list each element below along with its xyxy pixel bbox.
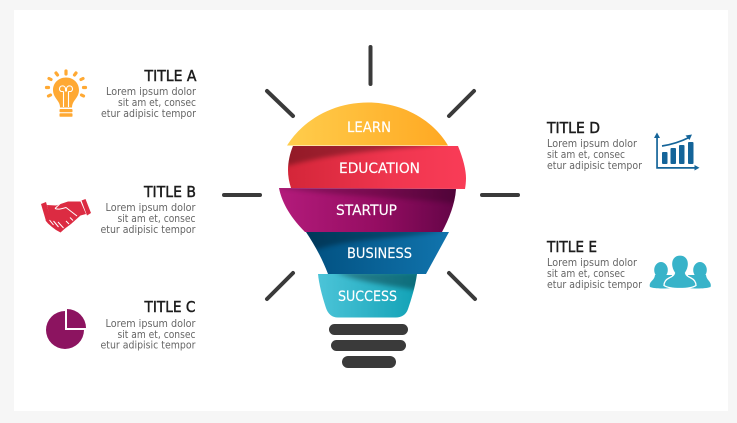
text: body B: sit am et, consec: [118, 212, 196, 225]
icon: light bulb: [46, 71, 86, 117]
text: title E: TITLE E: [546, 238, 597, 256]
segment: business: [306, 232, 449, 274]
text: title A: TITLE A: [144, 67, 197, 85]
text: title D: TITLE D: [546, 119, 600, 137]
segment: success: [318, 272, 422, 318]
segment: startup: [275, 186, 462, 232]
text: body C: etur adipisic tempor: [100, 338, 196, 352]
text: body C: sit am et, consec: [118, 328, 196, 341]
segment: startup: STARTUP: [336, 203, 397, 219]
segment: education: EDUCATION: [339, 161, 420, 177]
text: body E: [547, 256, 642, 291]
icon: handshake: [41, 199, 91, 232]
block: title A: [46, 67, 197, 120]
central lightbulb: [275, 102, 466, 368]
text: body B: Lorem ipsum dolor: [106, 201, 196, 214]
block: title C: [46, 298, 196, 352]
lightbulb rays: [224, 47, 518, 299]
text: body B: etur adipisic tempor: [100, 223, 196, 236]
bulb base: [329, 324, 408, 368]
text: body E: etur adipisic tempor: [547, 278, 642, 291]
text: body C: [100, 317, 196, 352]
text: body D: etur adipisic tempor: [547, 159, 642, 172]
text: body D: sit am et, consec: [547, 148, 625, 161]
text: body B: [100, 201, 196, 236]
icon: pie chart: [46, 309, 86, 349]
text: body A: Lorem ipsum dolor: [106, 85, 196, 98]
text: body A: [101, 85, 196, 120]
block: title B: [41, 183, 196, 236]
text: body D: [547, 137, 642, 172]
segment: education: [288, 146, 466, 189]
icon: people: [650, 255, 711, 289]
text: title C: TITLE C: [144, 298, 196, 316]
text: body A: sit am et, consec: [118, 96, 196, 109]
text: body E: Lorem ipsum dolor: [547, 256, 637, 269]
segment: learn: [287, 102, 448, 146]
segment: learn: LEARN: [347, 120, 391, 136]
text: title B: TITLE B: [143, 183, 196, 201]
segment: success: SUCCESS: [338, 289, 397, 305]
segment: business: BUSINESS: [347, 246, 412, 262]
text: body C: Lorem ipsum dolor: [106, 317, 196, 330]
icon: growth bar chart: [654, 132, 700, 170]
block: title E: [546, 238, 711, 291]
text: body A: etur adipisic tempor: [101, 107, 196, 120]
block: title D: [546, 119, 700, 172]
text: body E: sit am et, consec: [547, 267, 625, 280]
text: body D: Lorem ipsum dolor: [547, 137, 637, 150]
